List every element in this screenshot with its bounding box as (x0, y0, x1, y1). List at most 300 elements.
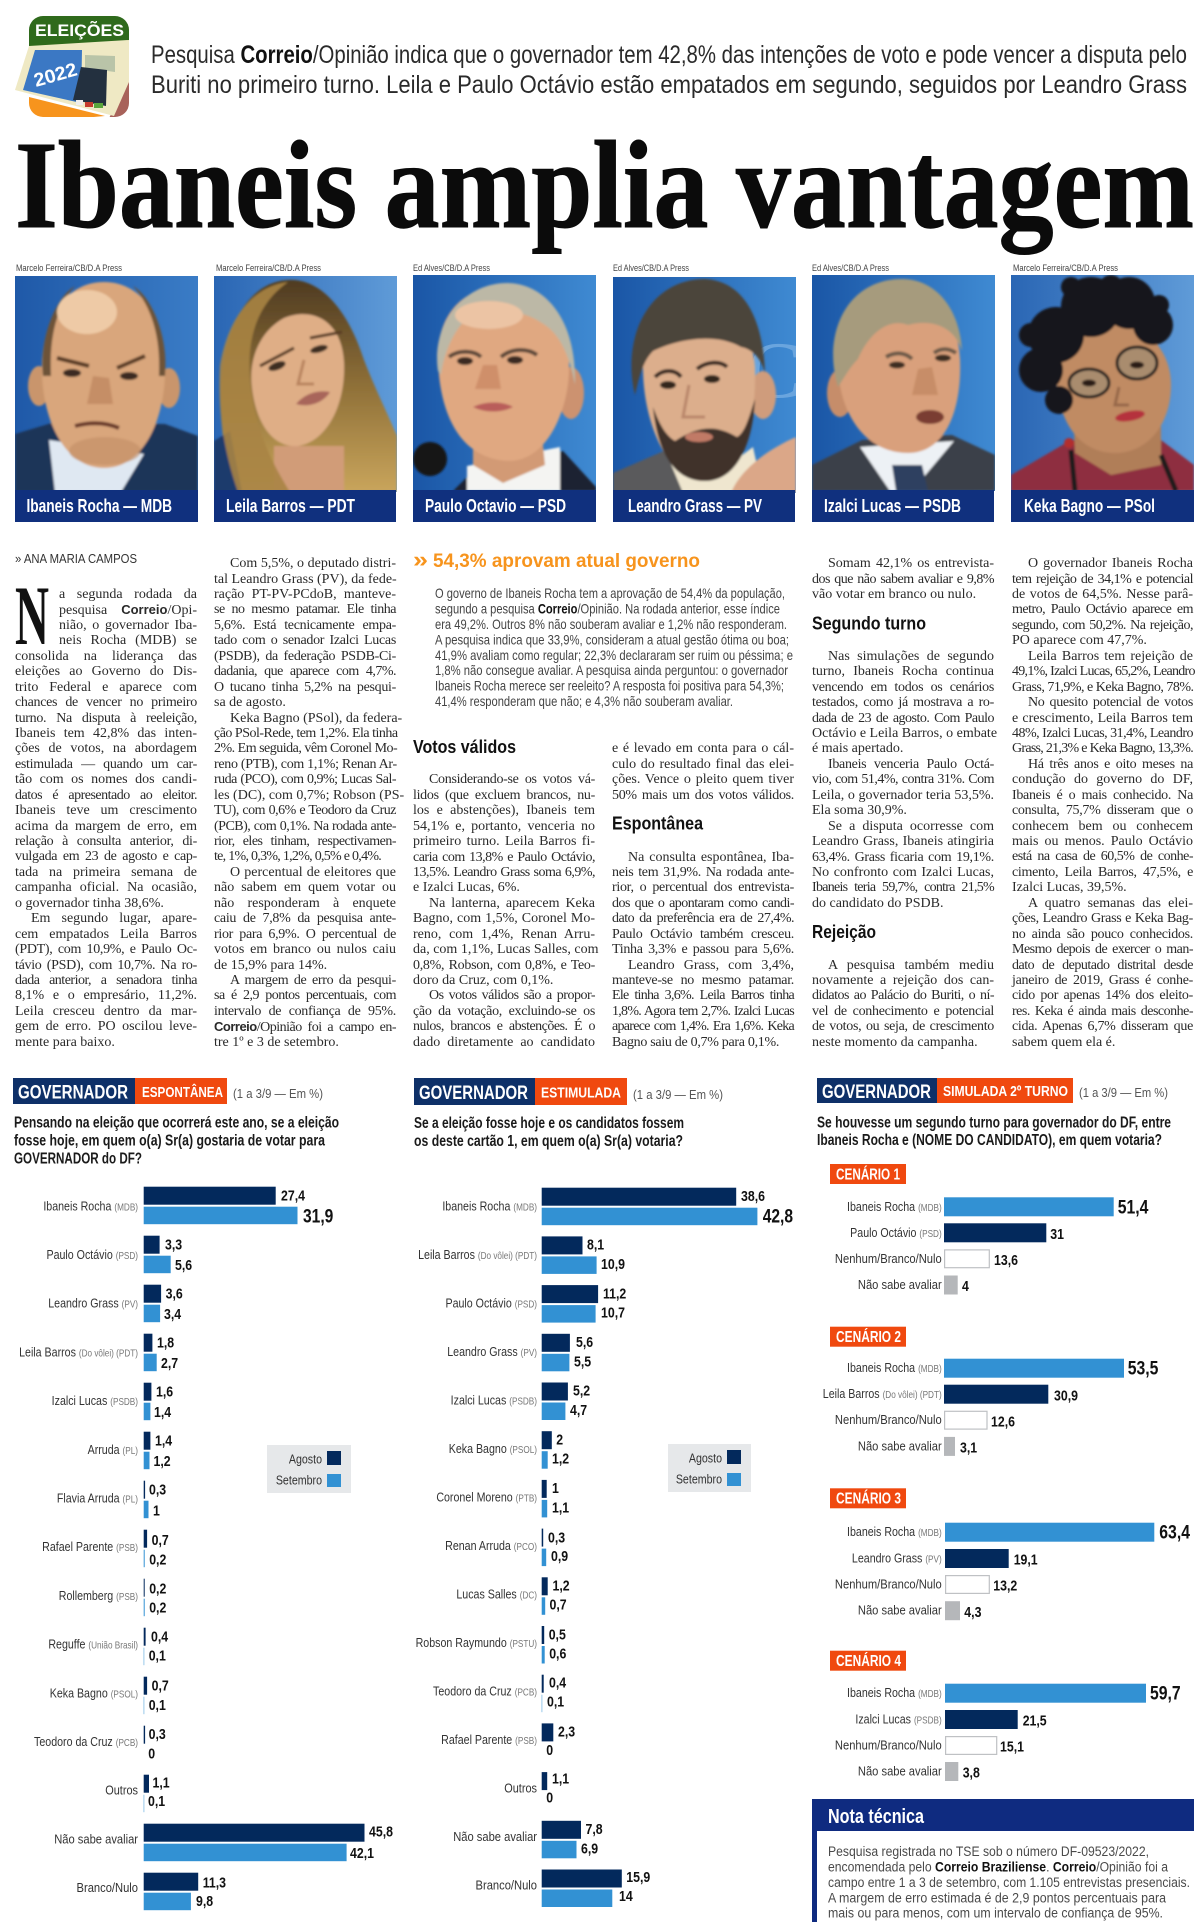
text block: column 3: caria com 13,8% e Paulo Octávio, (413, 850, 595, 865)
row: Nenhum/Branco/Nulo: 13,2 (993, 1578, 1017, 1594)
row: Keka Bagno: 0,1 (149, 1697, 166, 1713)
row: Branco/Nulo: 14 (619, 1888, 633, 1904)
row: Teodoro da Cruz: 0,4 (549, 1675, 567, 1691)
row: Rafael Parente (441, 1723, 575, 1758)
row: Branco/Nulo: 11,3 (203, 1875, 226, 1891)
text block: column 1: estimulada — quando um car- (15, 757, 197, 772)
text block: column 1: dada anterior, a senadora tinha (15, 973, 197, 988)
row: Leila Barros: 8,1 (587, 1237, 605, 1253)
text block: column 6: A quatro semanas das elei- (1028, 896, 1193, 911)
text block: column 4 bottom: manteve-se no mesmo patamar. (612, 973, 794, 988)
row: Outros: Outros (504, 1781, 537, 1796)
row: Não sabe avaliar: 3,1 (960, 1440, 978, 1456)
text block: column 2: Correio/Opinião foi a campo en- (214, 1019, 396, 1035)
row: Ibaneis Rocha: 53,5 (1128, 1357, 1159, 1379)
row: Leila Barros: Leila Barros (Do vôlei) (PDT) (19, 1344, 138, 1360)
text block: column 6: conhecem bem ou conhecem (1012, 819, 1193, 834)
row: Keka Bagno: Keka Bagno (PSOL) (50, 1685, 138, 1701)
row: Rafael Parente: Rafael Parente (PSB) (42, 1539, 138, 1554)
portrait: Leila Barros (214, 263, 397, 522)
row: Não sabe avaliar: 45,8 (369, 1824, 393, 1840)
text block: column 4 top: ções. Vence o pleito quem tiver (612, 772, 794, 787)
text block: column 2: 5,6%. Está tecnicamente empa- (214, 618, 396, 633)
bar chart: espontânea (19, 1187, 393, 1910)
question: estimulada (414, 1115, 684, 1150)
row: Não sabe avaliar: 6,9 (581, 1841, 598, 1857)
text block: column 6: O governador Ibaneis Rocha (1028, 556, 1193, 571)
text block: column 4 bottom: neis tem 31,9%. Na rodada ante- (612, 865, 794, 880)
text block: column 2: votos em branco ou nulos caiu (214, 942, 396, 957)
portrait: Leandro Grass: Leandro Grass — PV (628, 496, 762, 516)
text block: column 1: gem de erro. PO oscilou leve- (15, 1019, 197, 1034)
scenario 3: CENÁRIO 3 (836, 1491, 901, 1508)
text block: column 6: de votos de 64,5%. Nesse parâ- (1012, 587, 1193, 602)
text block: column 6: Grass, 71,9%, e Keka Bagno, 78%. (1012, 680, 1194, 695)
row: Flavia Arruda (57, 1481, 166, 1519)
text block: column 6: consulta, 75,7% disseram que o (1012, 803, 1193, 818)
text block: column 6: PO aparece com 47,7%. (1012, 633, 1147, 648)
row: Leila Barros (418, 1236, 625, 1274)
portrait: Izalci Lucas: Ed Alves/CB/D.A Press (812, 263, 889, 273)
heading: Rejeição: Rejeição (812, 922, 876, 942)
text block: column 5 bottom: de votos, ou seja, de crescimento (812, 1019, 994, 1034)
row: Outros: 0 (546, 1789, 553, 1806)
text block: column 4 bottom: dato da preferência era de 27,4%. (612, 911, 794, 926)
row: Coronel Moreno: 1 (552, 1480, 559, 1496)
row: Ibaneis Rocha: 38,6 (741, 1188, 765, 1204)
text block: column 2: rior para 6,9%. O percentual de (214, 927, 396, 942)
portrait: Paulo Octavio: Paulo Octavio — PSD (425, 496, 566, 516)
text block: column 2: A margem de erro da pesqui- (230, 973, 396, 988)
box heading: 54,3% aprovam atual governo: » (413, 547, 428, 572)
text block: column 2: tre 1º e 3 de setembro. (214, 1035, 339, 1050)
row: Coronel Moreno: Coronel Moreno (PTB) (436, 1489, 537, 1505)
row: Ibaneis Rocha: 42,8 (763, 1205, 793, 1227)
text block: column 1: a segunda rodada da (59, 587, 197, 602)
box text: aprovação (435, 585, 793, 709)
text block: column 2: ruda (PCO), com 0,9%; Lucas Sal- (214, 772, 396, 787)
text block: column 2: ção PSol-Rede, tem 1,2%. Ela tinha (214, 726, 398, 741)
row: Leandro Grass: Leandro Grass (PV) (852, 1550, 942, 1566)
row: Lucas Salles: Lucas Salles (DC) (456, 1586, 537, 1602)
text block: column 4 top: culo do resultado final das elei- (612, 757, 794, 772)
text block: column 2: rior, eles tinham, respectivamen- (214, 834, 396, 849)
panel: nota técnica: A margem de erro estimada é de 2,9 pontos percentuais para (828, 1890, 1166, 1905)
row: Flavia Arruda: 1 (153, 1503, 160, 1519)
row: Reguffe: 0,4 (151, 1629, 169, 1645)
row: Leandro Grass: 19,1 (1014, 1552, 1038, 1568)
row: Robson Raymundo: Robson Raymundo (PSTU) (416, 1635, 537, 1650)
portrait: Paulo Octavio: Ed Alves/CB/D.A Press (413, 263, 490, 273)
row: Ibaneis Rocha: 51,4 (1118, 1196, 1149, 1218)
row: Nenhum/Branco/Nulo (835, 1737, 1024, 1755)
text block: column 3: primeiro turno. Leila Barros fi- (413, 834, 595, 849)
text block: column 5 middle: Se a disputa ocorresse com (828, 819, 994, 834)
text block: column 1: cem empatados Leila Barros (15, 927, 197, 942)
text block: column 3: Os votos válidos são a propor- (429, 988, 595, 1003)
text block: column 6: Mesmo depois de exercer o man- (1012, 942, 1193, 957)
text block: column 6: mais ou menos. Paulo Octávio (1012, 834, 1193, 849)
chart header: governador espontânea (13, 1078, 323, 1104)
text block: column 4 bottom: Paulo Octávio também cresceu. (612, 927, 794, 942)
text block: column 6: Leila Barros tem rejeição de (1028, 649, 1193, 664)
row: Teodoro da Cruz: 0,1 (547, 1694, 565, 1710)
text block: column 6: e crescimento, Leila Barros tem (1012, 711, 1193, 726)
row: Paulo Octávio (850, 1223, 1064, 1242)
chart header: governador simulada 2º turno: SIMULADA 2º TURNO (943, 1083, 1068, 1100)
row: Leila Barros: 10,9 (601, 1256, 625, 1272)
text block: column 4 bottom: Na consulta espontânea, Iba- (628, 850, 794, 865)
row: Arruda: Arruda (PL) (88, 1442, 138, 1457)
text block: column 2: reno (PTB), com 1,1%; Renan Ar- (214, 757, 397, 772)
text block: column 1: turno. Na disputa à reeleição, (15, 711, 197, 726)
panel: nota técnica: mais ou para menos, com um intervalo de confiança de 95%. (828, 1906, 1163, 1921)
row: Robson Raymundo: 0,6 (549, 1645, 566, 1662)
portrait: Leandro Grass: Ed Alves/CB/D.A Press (613, 263, 689, 273)
portrait: Keka Bagno: Keka Bagno — PSol (1024, 496, 1155, 516)
text block: column 3: 13,5%. Leandro Grass soma 6,9%, (413, 865, 595, 880)
text block: column 2: se no mesmo patamar. Ele tinha (214, 602, 396, 617)
row: Outros: 0,1 (148, 1793, 166, 1809)
text block: column 6: condução do governo do DF, (1012, 772, 1193, 787)
row: Leandro Grass: 5,5 (574, 1353, 592, 1370)
text block: column 4 top: e é levado em conta para o cál- (612, 741, 794, 756)
row: Outros (105, 1774, 170, 1812)
legend: estimulada (668, 1444, 751, 1492)
row: Nenhum/Branco/Nulo: Nenhum/Branco/Nulo (835, 1577, 942, 1592)
row: Ibaneis Rocha: 27,4 (281, 1188, 305, 1204)
heading: Votos válidos: Votos válidos (413, 737, 516, 757)
row: Paulo Octávio: 31 (1050, 1226, 1064, 1242)
row: Outros: Outros (105, 1783, 138, 1798)
row: Ibaneis Rocha: 63,4 (1159, 1521, 1190, 1543)
row: Izalci Lucas: 5,2 (573, 1383, 590, 1399)
row: Rafael Parente: 0,7 (152, 1532, 169, 1548)
row: Branco/Nulo: 15,9 (626, 1869, 650, 1885)
row: Outros: 1,1 (552, 1771, 570, 1787)
portrait: Izalci Lucas: Izalci Lucas — PSDB (824, 496, 961, 516)
portrait: Ibaneis Rocha: Marcelo Ferreira/CB/D.A Press (16, 263, 122, 273)
text block: column 3: e Izalci Lucas, 6%. (413, 880, 520, 895)
chart header: governador espontânea: (1 a 3/9 — Em %) (233, 1086, 323, 1101)
row: Paulo Octávio: Paulo Octávio (PSD) (46, 1247, 138, 1262)
legend: espontânea: Setembro (276, 1472, 322, 1488)
row: Ibaneis Rocha (847, 1682, 1181, 1704)
panel: nota técnica: encomendada pelo Correio Braziliense. Correio/Opinião foi a (828, 1860, 1168, 1874)
chart header: governador estimulada: GOVERNADOR (419, 1083, 528, 1104)
row: Izalci Lucas: 1,4 (154, 1404, 172, 1420)
row: Flavia Arruda: 0,3 (149, 1482, 166, 1498)
question: espontânea: fosse hoje, em quem o(a) Sr(a) gostaria de votar para (14, 1132, 325, 1150)
text block: column 5 middle: Octávio e Leila Barros, o embate (812, 726, 997, 741)
row: Nenhum/Branco/Nulo: Nenhum/Branco/Nulo (835, 1251, 942, 1266)
text block: column 2: não responderam à enquete (214, 896, 396, 911)
row: Lucas Salles: 0,7 (550, 1597, 567, 1613)
legend: espontânea: Agosto (289, 1451, 322, 1467)
legend: estimulada: Setembro (676, 1471, 722, 1487)
panel: nota técnica (812, 1799, 1194, 1922)
box text: aprovação: O governo de Ibaneis Rocha tem a aprovação de 54,4% da população, (435, 585, 785, 601)
row: Leila Barros: 30,9 (1054, 1387, 1078, 1404)
text block: column 5 middle: vencendo em todos os cenários (812, 680, 994, 695)
row: Leila Barros: Leila Barros (Do vôlei) (PDT) (418, 1247, 537, 1262)
text block: column 2: O tucano tinha 5,2% na pesqui- (214, 680, 396, 695)
row: Rafael Parente: 0,2 (149, 1551, 166, 1568)
text block: column 2: intervalo de confiança de 95%. (214, 1004, 396, 1019)
row: Leandro Grass (48, 1285, 183, 1322)
row: Renan Arruda (445, 1529, 568, 1566)
text block: column 1: o governador tinha 38,6%. (15, 896, 164, 911)
row: Renan Arruda: 0,3 (548, 1530, 565, 1546)
question: espontânea (14, 1114, 339, 1168)
row: Ibaneis Rocha (43, 1187, 334, 1227)
text block: column 5 middle (812, 649, 997, 911)
text block: column 6: 48%, Izalci Lucas, 31,4%, Leandro (1012, 726, 1193, 741)
text block: column 2: TU), com 0,6% e Teodoro da Cruz (214, 803, 396, 818)
text block: column 6: Ibaneis é o mais conhecido. Na (1012, 788, 1193, 803)
row: Nenhum/Branco/Nulo (835, 1250, 1018, 1268)
text block: column 5 top: dos que não sabem avaliar e 9,8% (812, 572, 994, 587)
text block: column 4 bottom: aparece com 1,4%. Era 1,6%. Keka (612, 1019, 794, 1034)
row: Não sabe avaliar: 3,8 (963, 1765, 980, 1781)
box text: aprovação: A pesquisa indica que 33,9%, consideram a atual gestão ótima ou boa; (435, 631, 789, 647)
row: Ibaneis Rocha (847, 1521, 1190, 1543)
text block: column 1: 8,1% e o empresário, 11,2%. (15, 988, 197, 1003)
box text: aprovação: 1,8% não consegue avaliar. A pesquisa ainda perguntou: o governador (435, 662, 788, 678)
panel: nota técnica: Pesquisa registrada no TSE sob o número DF-09523/2022, (828, 1844, 1149, 1859)
box text: aprovação: segundo a pesquisa Correio/Opinião. Na rodada anterior, esse índice (435, 600, 780, 616)
scenario 1 (830, 1164, 1149, 1294)
text block: column 1: campanha oficial. Na ocasião, (15, 880, 197, 895)
text block: column 6: segundo, com 50,2%. Na rejeição, (1012, 618, 1193, 633)
text block: column 2: O percentual de eleitores que (230, 865, 396, 880)
text block: column 5 middle: Ibaneis venceria Paulo Octá- (828, 757, 994, 772)
text block: column 1: pesquisa Correio/Opi- (59, 602, 197, 618)
row: Lucas Salles: 1,2 (552, 1578, 570, 1594)
text block: column 4 bottom (612, 850, 794, 1050)
text block: column 1: Em segundo lugar, apare- (31, 911, 197, 926)
text block: column 3: Considerando-se os votos vá- (429, 772, 595, 787)
heading: Espontânea: Espontânea (612, 814, 704, 834)
row: Rollemberg (59, 1579, 166, 1616)
row: Leandro Grass: Leandro Grass (PV) (447, 1344, 537, 1359)
row: Paulo Octávio (445, 1285, 626, 1323)
text block: column 3: doro da Cruz, com 0,1%. (413, 973, 553, 988)
row: Não sabe avaliar (858, 1762, 980, 1781)
row: Não sabe avaliar: Não sabe avaliar (858, 1603, 942, 1618)
text block: column 6: dato de deputado distrital desde (1012, 958, 1193, 973)
text block: column 5 middle: Leandro Grass, Ibaneis atingiria (812, 834, 994, 849)
text block: column 2: te, 1%, 0,3%, 1,2%, 0,5% e 0,4%. (214, 849, 381, 864)
text block: column 1: mente para baixo. (15, 1035, 115, 1050)
text block: column 2: sa de agosto. (214, 695, 286, 710)
text block: column 2: les (DC), com 0,7%; Robson (PS- (214, 788, 404, 803)
row: Branco/Nulo (476, 1869, 650, 1907)
text block: column 1: acima da margem de erro, em (15, 819, 197, 834)
text block: column 2: ração PT-PV-PCdoB, manteve- (214, 587, 396, 602)
text block: column 3: los e abstenções), Ibaneis tem (413, 803, 595, 818)
scenario 4 (830, 1651, 1181, 1781)
chart header: governador simulada 2º turno (817, 1078, 1168, 1103)
text block: column 3: Na lanterna, aparecem Keka (429, 896, 595, 911)
text block: column 5 middle: Ela soma 30,9%. (812, 803, 907, 818)
text block: column 1: távio (PSD), com 10,7%. Na ro- (15, 958, 197, 973)
box text: aprovação: Ibaneis Rocha merece ser reeleito? A resposta foi positiva para 54,3%; (435, 678, 784, 694)
text block: column 3: reno, com 1,4%, Renan Arru- (413, 927, 595, 942)
text block: column 1: tão com os nomes dos candi- (15, 772, 197, 787)
text block: column 3: nulos, brancos e abstenções. É o (413, 1019, 595, 1034)
text block: column 6: tem rejeição de 34,1% e potencial (1012, 572, 1193, 587)
text block: column 3: da, com 1,1%, Lucas Salles, com (413, 942, 598, 957)
row: Coronel Moreno: 1,1 (552, 1499, 570, 1516)
text block: column 1: eleições ao Governo do Dis- (15, 664, 197, 679)
row: Ibaneis Rocha (847, 1196, 1149, 1218)
text block: column 5 middle: Ibaneis teria 59,7%, contra 21,5% (812, 880, 994, 895)
text block: column 6: res. Keka é ainda mais desconhe- (1012, 1004, 1193, 1019)
text block: column 4 bottom: 1,8%. Agora tem 2,7%. Izalci Lucas (612, 1004, 794, 1019)
row: Izalci Lucas: 21,5 (1023, 1713, 1047, 1729)
text block: column 4 bottom: rior, o percentual dos entrevista- (612, 880, 794, 895)
row: Reguffe (48, 1628, 169, 1665)
bar chart: estimulada (416, 1188, 793, 1907)
row: Branco/Nulo (77, 1873, 226, 1910)
row: Não sabe avaliar: Não sabe avaliar (858, 1277, 942, 1292)
row: Paulo Octávio: Paulo Octávio (PSD) (445, 1295, 537, 1311)
row: Teodoro da Cruz: Teodoro da Cruz (PCB) (433, 1683, 537, 1699)
text block: column 6: janeiro de 2019, Grass é conhe- (1012, 973, 1193, 988)
row: Nenhum/Branco/Nulo: 12,6 (991, 1413, 1015, 1430)
text block: column 4 top: 50% mais um dos votos válidos. (612, 788, 794, 803)
portrait: Leandro Grass (613, 263, 801, 522)
text block: column 2: dadania, que aparece com 4,7%. (214, 664, 396, 679)
text block: column 3: lidos (que excluem brancos, nu- (413, 788, 595, 803)
text block: column 4 bottom: Tinha 3,3% e passou para 5,6%. (612, 942, 794, 957)
legend: estimulada: Agosto (689, 1450, 722, 1466)
text block: column 1: Ibaneis tem 42,8% das inten- (15, 726, 197, 741)
scenario 4: CENÁRIO 4 (836, 1653, 901, 1670)
row: Izalci Lucas: Izalci Lucas (PSDB) (52, 1393, 138, 1408)
text block: column 2: Com 5,5%, o deputado distri- (230, 556, 396, 571)
question: estimulada: Se a eleição fosse hoje e os candidatos fossem (414, 1115, 684, 1132)
text block: column 4 top (612, 741, 794, 803)
text block: column 2: de 15,9% para 14%. (214, 958, 327, 973)
row: Leandro Grass: Leandro Grass (PV) (48, 1296, 138, 1311)
text block: column 6: sabem quem ela é. (1012, 1035, 1115, 1050)
row: Leandro Grass (852, 1549, 1038, 1568)
box text: aprovação: 41,9% avaliam como regular; 22,3% declararam ser ruim ou péssima; e (435, 647, 793, 663)
portrait: Leandro Grass: C (748, 327, 801, 415)
text block: column 6: ções, Leandro Grass e Keka Bag- (1012, 911, 1193, 926)
portrait: Leila Barros: Leila Barros — PDT (226, 496, 355, 516)
text block: column 1: Ibaneis teve um crescimento (15, 803, 197, 818)
text block: column 6: cido por apenas 14% dos eleito- (1012, 988, 1193, 1003)
icon: eleições 2022 voting machine: 2022 (32, 59, 80, 92)
row: Não sabe avaliar (453, 1821, 603, 1858)
row: Rollemberg: Rollemberg (PSB) (59, 1588, 138, 1603)
row: Leandro Grass: 5,6 (576, 1334, 593, 1350)
text block: column 2: tado com o senador Izalci Lucas (214, 633, 396, 648)
text block: column 1: (PDT), com 10,9%, e Paulo Oc- (15, 942, 197, 957)
deck text (151, 41, 1187, 99)
row: Não sabe avaliar (54, 1824, 393, 1861)
question: espontânea: Pensando na eleição que ocorrerá este ano, se a eleição (14, 1114, 339, 1132)
text block: column 5 middle: Leila, o governador teria 53,5%. (812, 788, 994, 803)
row: Rollemberg: 0,2 (149, 1600, 166, 1616)
text block: column 6: Grass, 21,3% e Keka Bagno, 13,3%. (1012, 741, 1193, 756)
row: Leila Barros: 2,7 (161, 1355, 178, 1371)
chart header: governador espontânea: GOVERNADOR (18, 1082, 128, 1104)
text block: column 6: cida. Apenas 6,7% disseram que (1012, 1019, 1193, 1034)
text block: column 1: neis Rocha (MDB) se (59, 633, 197, 648)
text block: column 1: consolida na liderança das (15, 649, 197, 664)
row: Izalci Lucas: Izalci Lucas (PSDB) (451, 1392, 537, 1408)
text block: column 2: (PCB), com 0,1%. Na rodada ante- (214, 819, 396, 834)
text block: column 4 bottom: dos que o apontaram como candi- (612, 896, 794, 911)
text block: column 2: sa é 2,9 pontos percentuais, com (214, 988, 396, 1003)
row: Ibaneis Rocha: Ibaneis Rocha (MDB) (847, 1685, 942, 1700)
heading: Segundo turno: Segundo turno (812, 614, 926, 634)
text block: column 2: (PSDB), da federação PSDB-Ci- (214, 649, 396, 664)
text block: column 1: ções de votos, na abordagem (15, 741, 197, 756)
text block: column 5 middle: vio, com 51,4%, contra 31%. Com (812, 772, 994, 787)
text block: column 6: metro, Paulo Octávio aparece em (1012, 602, 1193, 617)
row: Rafael Parente: Rafael Parente (PSB) (441, 1732, 537, 1747)
portrait: Leila Barros: Marcelo Ferreira/CB/D.A Press (216, 263, 321, 273)
text block: column 5 middle: 63,4%. Grass ficaria com 19,1%. (812, 850, 994, 864)
text block: column 4 bottom: Ele tinha 3,6%. Leila Barros tinha (612, 988, 794, 1003)
text block: column 5 middle: turno, Ibaneis Rocha continua (812, 664, 994, 679)
row: Nenhum/Branco/Nulo (835, 1411, 1015, 1430)
row: Keka Bagno (449, 1431, 569, 1469)
question: segundo turno (817, 1114, 1171, 1149)
row: Nenhum/Branco/Nulo (835, 1576, 1017, 1594)
scenario 2: CENÁRIO 2 (836, 1329, 901, 1346)
row: Teodoro da Cruz (34, 1726, 166, 1762)
text block: column 5 bottom: A pesquisa também mediu (828, 958, 994, 973)
text block: column 3: 0,8%, Robson, com 0,8%, e Teo- (413, 958, 595, 973)
row: Branco/Nulo: Branco/Nulo (476, 1878, 537, 1893)
row: Não sabe avaliar: Não sabe avaliar (453, 1829, 537, 1844)
text block: column 5 top: vão votar em branco ou nulo. (812, 587, 976, 602)
row: Ibaneis Rocha: Ibaneis Rocha (MDB) (847, 1360, 942, 1375)
row: Nenhum/Branco/Nulo: 13,6 (994, 1252, 1018, 1268)
row: Izalci Lucas: Izalci Lucas (PSDB) (855, 1711, 942, 1727)
portrait: Ibaneis Rocha (15, 263, 198, 522)
text block: column 1: vulgada em 23 de agosto e cap- (15, 849, 197, 864)
row: Keka Bagno: 1,2 (552, 1451, 569, 1467)
text block: column 1: datos é apresentado ao eleitor. (15, 788, 197, 803)
row: Branco/Nulo: 9,8 (196, 1893, 214, 1909)
row: Rafael Parente: 2,3 (558, 1723, 575, 1740)
row: Não sabe avaliar: Não sabe avaliar (858, 1764, 942, 1779)
row: Paulo Octávio: 5,6 (175, 1257, 192, 1273)
row: Não sabe avaliar: 4,3 (964, 1604, 981, 1620)
question: estimulada: os deste cartão 1, em quem o(a) Sr(a) votaria? (414, 1133, 683, 1150)
question: espontânea: GOVERNADOR do DF? (14, 1150, 142, 1168)
row: Teodoro da Cruz: Teodoro da Cruz (PCB) (34, 1734, 138, 1749)
box text: aprovação: 41,4% responderam que não; e 4,3% não souberam avaliar. (435, 693, 733, 709)
scenario 2 (823, 1327, 1159, 1456)
row: Ibaneis Rocha: 31,9 (303, 1205, 334, 1227)
row: Rafael Parente: 0 (546, 1742, 553, 1758)
icon: eleições 2022 voting machine: ELEIÇÕES (35, 20, 124, 40)
row: Leandro Grass: 3,6 (166, 1286, 183, 1302)
text block: column 6: 49,1%, Izalci Lucas, 65,2%, Leandro (1012, 664, 1195, 679)
row: Rollemberg: 0,2 (149, 1581, 166, 1597)
row: Não sabe avaliar (858, 1601, 981, 1620)
text block: column 6: no ainda são pouco conhecidos. (1012, 927, 1193, 942)
scenario 1: CENÁRIO 1 (836, 1166, 900, 1184)
